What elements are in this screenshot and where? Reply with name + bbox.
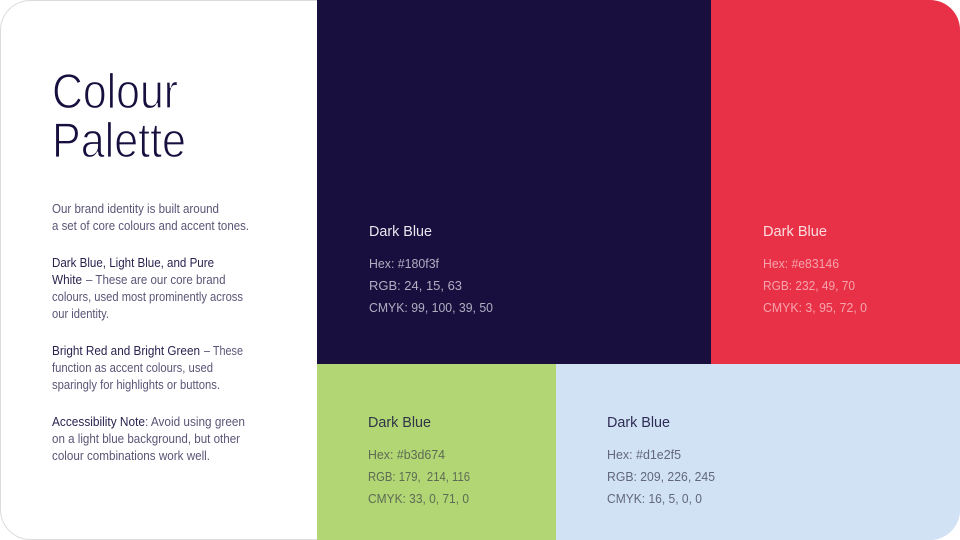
title: Palette [52, 114, 186, 168]
panel: bright red swatch [711, 0, 960, 364]
text block: introduction: Our brand identity is built around [52, 202, 219, 216]
panel: light blue swatch [556, 364, 960, 540]
colour values [369, 257, 493, 315]
text block: accessibility note: : Avoid using green [145, 415, 245, 429]
colour values: CMYK: 3, 95, 72, 0 [763, 301, 867, 315]
swatch name: Dark Blue [763, 223, 827, 240]
text block: core colours: White [52, 273, 82, 287]
colour values [368, 448, 470, 506]
text block: introduction [52, 202, 249, 233]
text block: accessibility note: on a light blue background, but other [52, 432, 240, 446]
swatch name: Dark Blue [369, 223, 432, 240]
text block: core colours: Dark Blue, Light Blue, and Pure [52, 256, 214, 270]
colour values: RGB: 24, 15, 63 [369, 279, 462, 293]
panel: dark blue swatch [317, 0, 711, 364]
title: Colour [52, 65, 178, 119]
text block: core colours: colours, used most prominently across [52, 290, 243, 304]
text block: accessibility note: colour combinations work well. [52, 449, 210, 463]
title [52, 65, 186, 168]
colour values: RGB: 209, 226, 245 [607, 470, 715, 484]
colour values: Hex: #180f3f [369, 257, 440, 271]
text block: introduction: a set of core colours and accent tones. [52, 219, 249, 233]
text block: accent colours: function as accent colours, used [52, 361, 213, 375]
colour values: CMYK: 33, 0, 71, 0 [368, 492, 469, 506]
text block: accent colours: Bright Red and Bright Green [52, 344, 200, 358]
text block: accent colours: sparingly for highlights or buttons. [52, 378, 220, 392]
swatch name: Dark Blue [368, 414, 431, 431]
colour values: CMYK: 16, 5, 0, 0 [607, 492, 702, 506]
colour values: Hex: #e83146 [763, 257, 839, 271]
colour values: CMYK: 99, 100, 39, 50 [369, 301, 493, 315]
colour values: RGB: 232, 49, 70 [763, 279, 855, 293]
text block: core colours: our identity. [52, 307, 109, 321]
swatch name: Dark Blue [607, 414, 670, 431]
text block: core colours [52, 256, 243, 321]
text block: core colours: – These are our core brand [86, 273, 226, 287]
panel: bright green swatch [317, 364, 556, 540]
colour values: Hex: #d1e2f5 [607, 448, 681, 462]
colour values [763, 257, 867, 315]
text block: accent colours [52, 344, 243, 392]
colour values: Hex: #b3d674 [368, 448, 445, 462]
text block: accessibility note: Accessibility Note [52, 415, 145, 429]
text block: accent colours: – These [204, 344, 243, 358]
colour values: RGB: 179, 214, 116 [368, 470, 470, 484]
colour values [607, 448, 715, 506]
text block: accessibility note [52, 415, 245, 463]
